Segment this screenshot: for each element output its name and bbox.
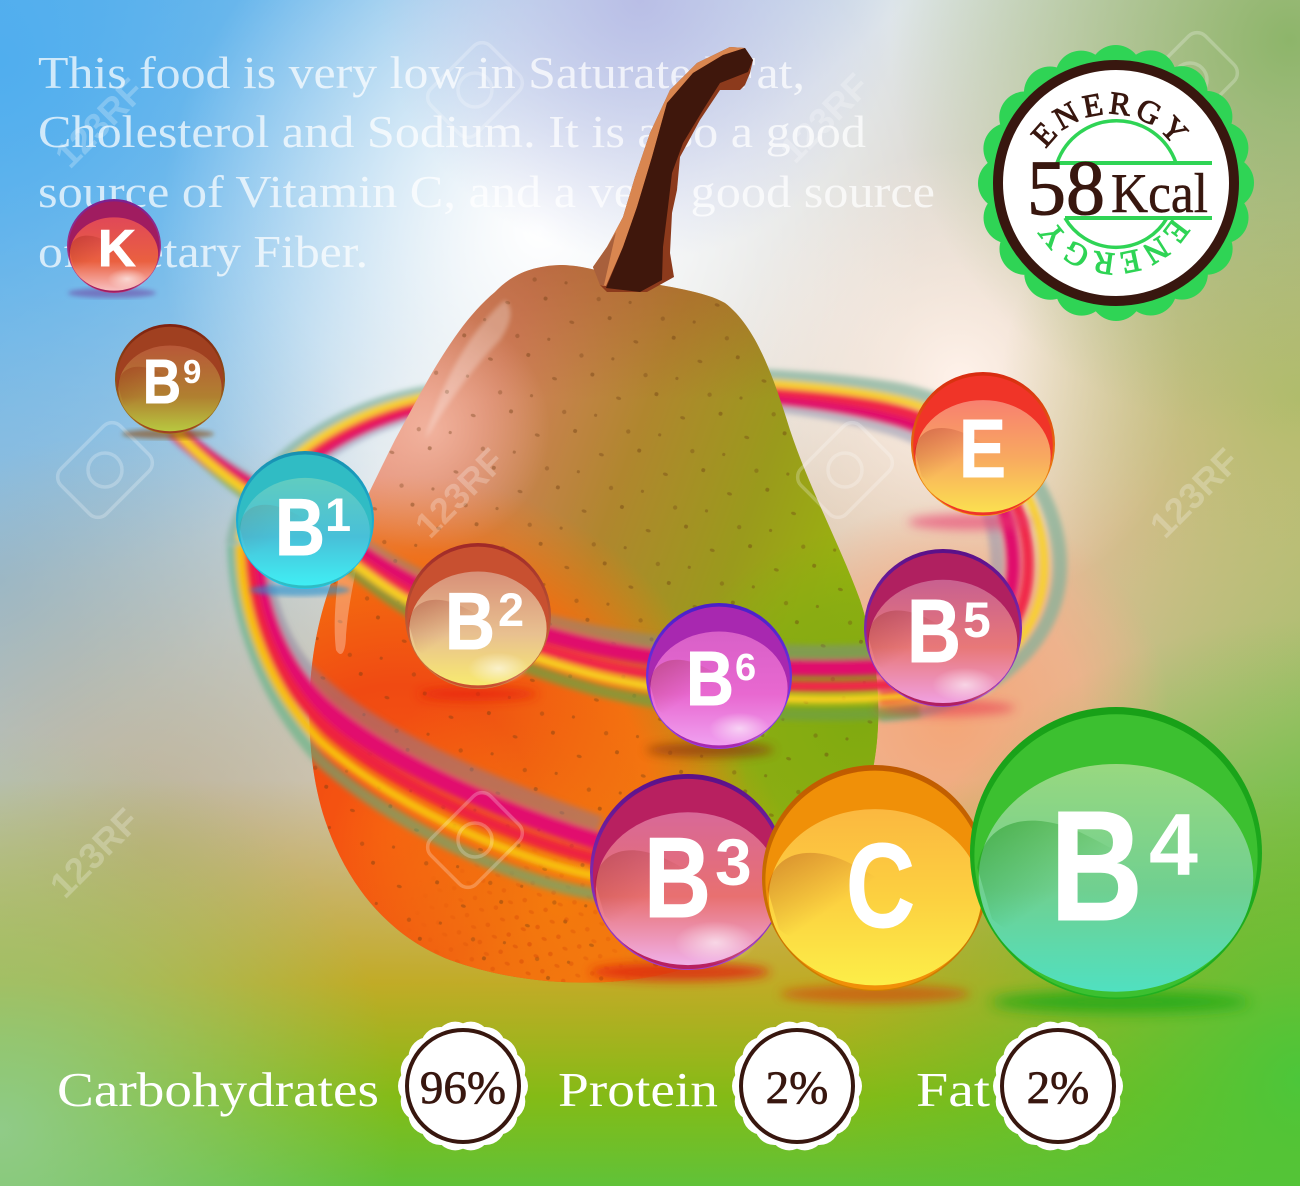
watermarks: 123RF <box>47 70 152 176</box>
watermarks: 123RF <box>1142 440 1247 546</box>
bubble: vitamin B9: B <box>143 348 181 417</box>
bubble: vitamin B4: 4 <box>1149 795 1198 894</box>
bubble: vitamin B9: 9 <box>183 353 201 390</box>
pear body <box>290 260 900 1000</box>
bubble: vitamin B1 <box>236 451 374 596</box>
bubble: vitamin B3 <box>590 774 786 981</box>
bubble: vitamin B2 <box>405 543 551 701</box>
bubble: vitamin C: C <box>846 819 915 953</box>
energy badge: ENERGY <box>1037 220 1191 276</box>
fat stat: Fat <box>916 1062 990 1117</box>
bubble: vitamin B1: 1 <box>325 488 351 541</box>
bubble: vitamin B5: B <box>907 582 961 682</box>
rainbow ring: lower front section <box>233 545 600 895</box>
protein stat <box>558 1030 853 1142</box>
bubble: vitamin C <box>762 765 988 1003</box>
rainbow ring: upper front section <box>175 430 920 715</box>
intro text block <box>38 47 935 277</box>
watermarks: 123RF <box>42 800 147 906</box>
bubble: vitamin B6: 6 <box>735 647 756 689</box>
intro text block: This food is very low in Saturated Fat, <box>38 47 805 98</box>
energy badge: Kcal <box>1111 163 1208 225</box>
carbohydrates stat: 96% <box>420 1062 506 1114</box>
fat stat: 2% <box>1027 1062 1089 1114</box>
bubble: vitamin B5: 5 <box>963 592 991 648</box>
bubble: vitamin B3: 3 <box>715 825 752 899</box>
fat stat <box>916 1030 1114 1142</box>
watermarks: 123RF <box>772 65 877 171</box>
bubble: vitamin B2: B <box>445 577 495 667</box>
bubble: vitamin B5 <box>864 549 1022 716</box>
bubble: vitamin K: K <box>98 220 136 278</box>
bubble: vitamin B3: B <box>644 815 711 942</box>
energy badge: 58 <box>1027 144 1105 231</box>
bubble: vitamin B4 <box>970 707 1262 1013</box>
carbohydrates stat: Carbohydrates <box>57 1062 379 1117</box>
watermarks <box>42 28 1257 911</box>
intro text block: source of Vitamin C, and a very good source <box>38 166 935 217</box>
energy badge <box>978 45 1254 321</box>
bubble: vitamin B6: B <box>686 636 734 722</box>
bubble: vitamin B4: B <box>1050 779 1143 954</box>
bubble: vitamin B6 <box>646 603 792 757</box>
bubble: vitamin B9 <box>115 324 225 439</box>
energy badge: ENERGY <box>1030 92 1190 149</box>
rainbow ring: back section <box>233 374 1060 715</box>
protein stat: 2% <box>766 1062 828 1114</box>
carbohydrates stat <box>57 1030 519 1142</box>
bubble: vitamin K <box>67 199 161 298</box>
bubble: vitamin B1: B <box>275 483 325 573</box>
bubble: vitamin E <box>908 372 1055 530</box>
intro text block: Cholesterol and Sodium. It is also a good <box>38 106 866 157</box>
pear stem <box>593 47 753 292</box>
watermarks: 123RF <box>777 805 882 911</box>
bubble: vitamin B2: 2 <box>498 583 524 636</box>
bubble: vitamin E: E <box>959 402 1006 495</box>
watermarks: 123RF <box>407 440 512 546</box>
intro text block: of Dietary Fiber. <box>38 226 368 277</box>
protein stat: Protein <box>558 1062 718 1117</box>
